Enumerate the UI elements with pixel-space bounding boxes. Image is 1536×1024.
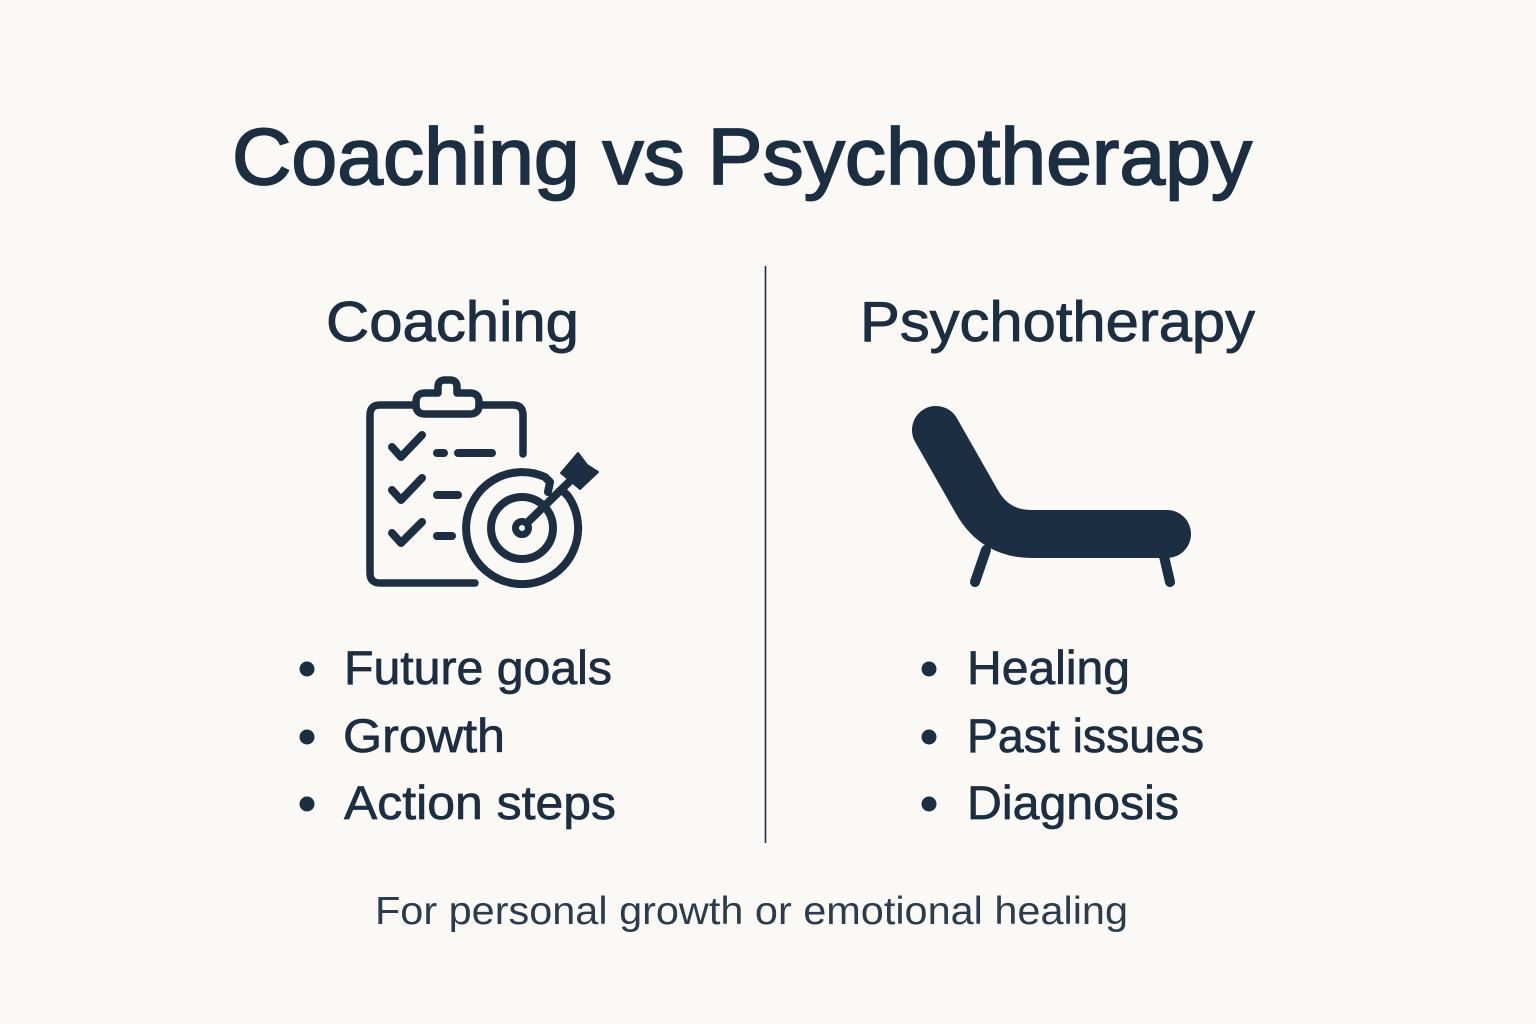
- bullet list: psychotherapy: Diagnosis: [967, 776, 1179, 829]
- bullet list: psychotherapy: Past issues: [967, 709, 1204, 762]
- bullet list: coaching: Action steps: [344, 776, 616, 829]
- icon: clipboard with checklist and target: [370, 380, 598, 584]
- bullet list: coaching: [300, 641, 616, 829]
- panel: coaching: [300, 290, 616, 829]
- bullet list: psychotherapy: Healing: [967, 641, 1130, 694]
- icon: therapy couch: [936, 430, 1170, 582]
- heading: coaching: Coaching: [326, 290, 579, 354]
- panel: psychotherapy: [860, 290, 1256, 829]
- bullet list: coaching: Growth: [343, 709, 505, 762]
- title: Coaching vs Psychotherapy: [232, 112, 1252, 201]
- bullet list: psychotherapy: [922, 641, 1204, 829]
- footer caption: For personal growth or emotional healing: [375, 890, 1128, 933]
- heading: psychotherapy: Psychotherapy: [860, 290, 1256, 354]
- bullet list: coaching: Future goals: [344, 641, 612, 694]
